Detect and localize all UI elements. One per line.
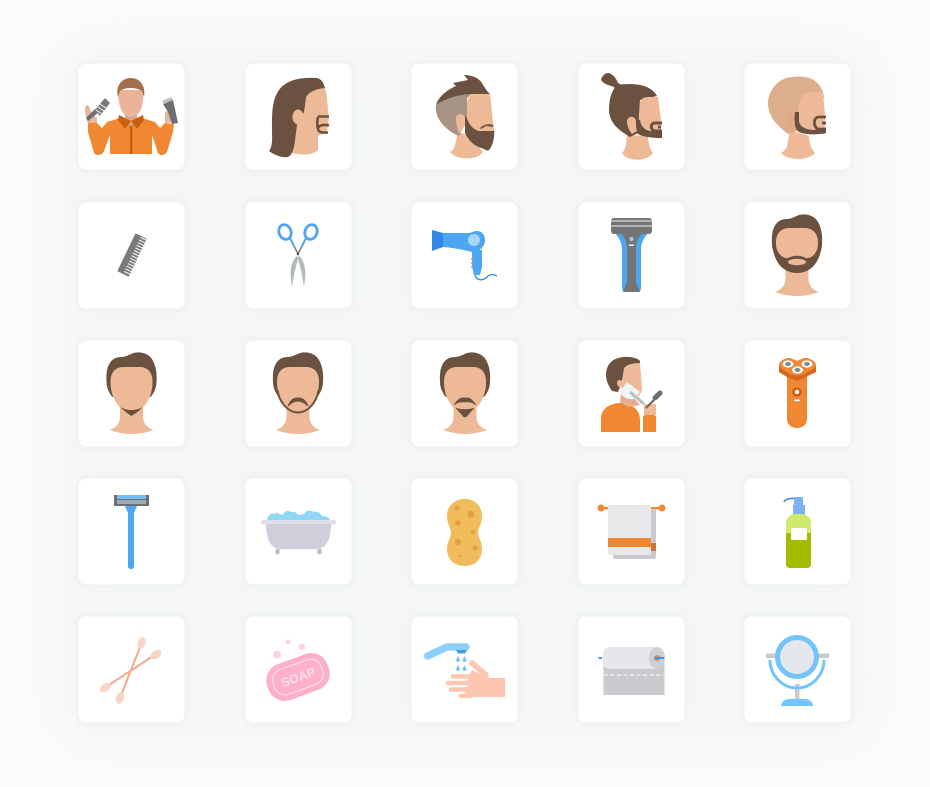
- tile: long hair profile: [245, 63, 352, 170]
- icon: full beard face: [772, 214, 822, 296]
- icon: sponge: [447, 499, 482, 566]
- tile: electric shaver: [744, 340, 851, 447]
- icon: undercut hair and full beard: [436, 75, 495, 158]
- tile: towel on rail: [578, 478, 685, 585]
- icon: soap pump bottle: [784, 497, 811, 568]
- icon: man shaving: [601, 357, 660, 432]
- icon: electric shaver: [779, 358, 816, 428]
- icon: bathtub with foam: [261, 511, 336, 554]
- icon: chin beard face: [106, 352, 157, 434]
- tile: hair dryer: [411, 202, 518, 309]
- tile: full beard front: [744, 202, 851, 309]
- tile: man bun profile: [578, 63, 685, 170]
- icon: cotton swabs: [98, 636, 163, 705]
- tile: cotton swabs: [78, 616, 185, 723]
- icon: shaved head with beard: [768, 77, 826, 159]
- icon: barber with comb and clipper: [85, 78, 178, 155]
- icon: towel on rail: [598, 504, 666, 559]
- tile: sponge: [411, 478, 518, 585]
- tile: soap pump bottle: [744, 478, 851, 585]
- icon: soap bar with bubbles: SOAP: [279, 665, 317, 690]
- tile: scissors: [245, 202, 352, 309]
- icon: disposable razor: [114, 495, 149, 569]
- tile: undercut profile: [411, 63, 518, 170]
- icon: man bun and beard: [601, 73, 662, 160]
- icon: hand under tap: [428, 647, 505, 697]
- tile: chinstrap front: [245, 340, 352, 447]
- icon: chinstrap beard face: [273, 352, 323, 434]
- icon: goatee face: [440, 352, 490, 434]
- tile: comb: [78, 202, 185, 309]
- icon: long hair and goatee: [269, 78, 329, 157]
- icon: table mirror: [766, 638, 829, 706]
- icon: safety razor: [611, 218, 652, 292]
- tile: goatee front: [411, 340, 518, 447]
- tile: paper towel roll: [578, 616, 685, 723]
- tile: chin beard front: [78, 340, 185, 447]
- tile: bathtub: [245, 478, 352, 585]
- icon: hair dryer: [432, 230, 497, 280]
- tile: bald profile: [744, 63, 851, 170]
- tile: washing hand: [411, 616, 518, 723]
- tile: barber: [78, 63, 185, 170]
- icon: paper towel roll: [598, 647, 665, 695]
- icon: scissors: [277, 223, 319, 287]
- tile: man shaving: [578, 340, 685, 447]
- tile: disposable razor: [78, 478, 185, 585]
- tile: safety razor: [578, 202, 685, 309]
- tile: soap: [245, 616, 352, 723]
- icon: comb: [117, 233, 147, 277]
- tile: table mirror: [744, 616, 851, 723]
